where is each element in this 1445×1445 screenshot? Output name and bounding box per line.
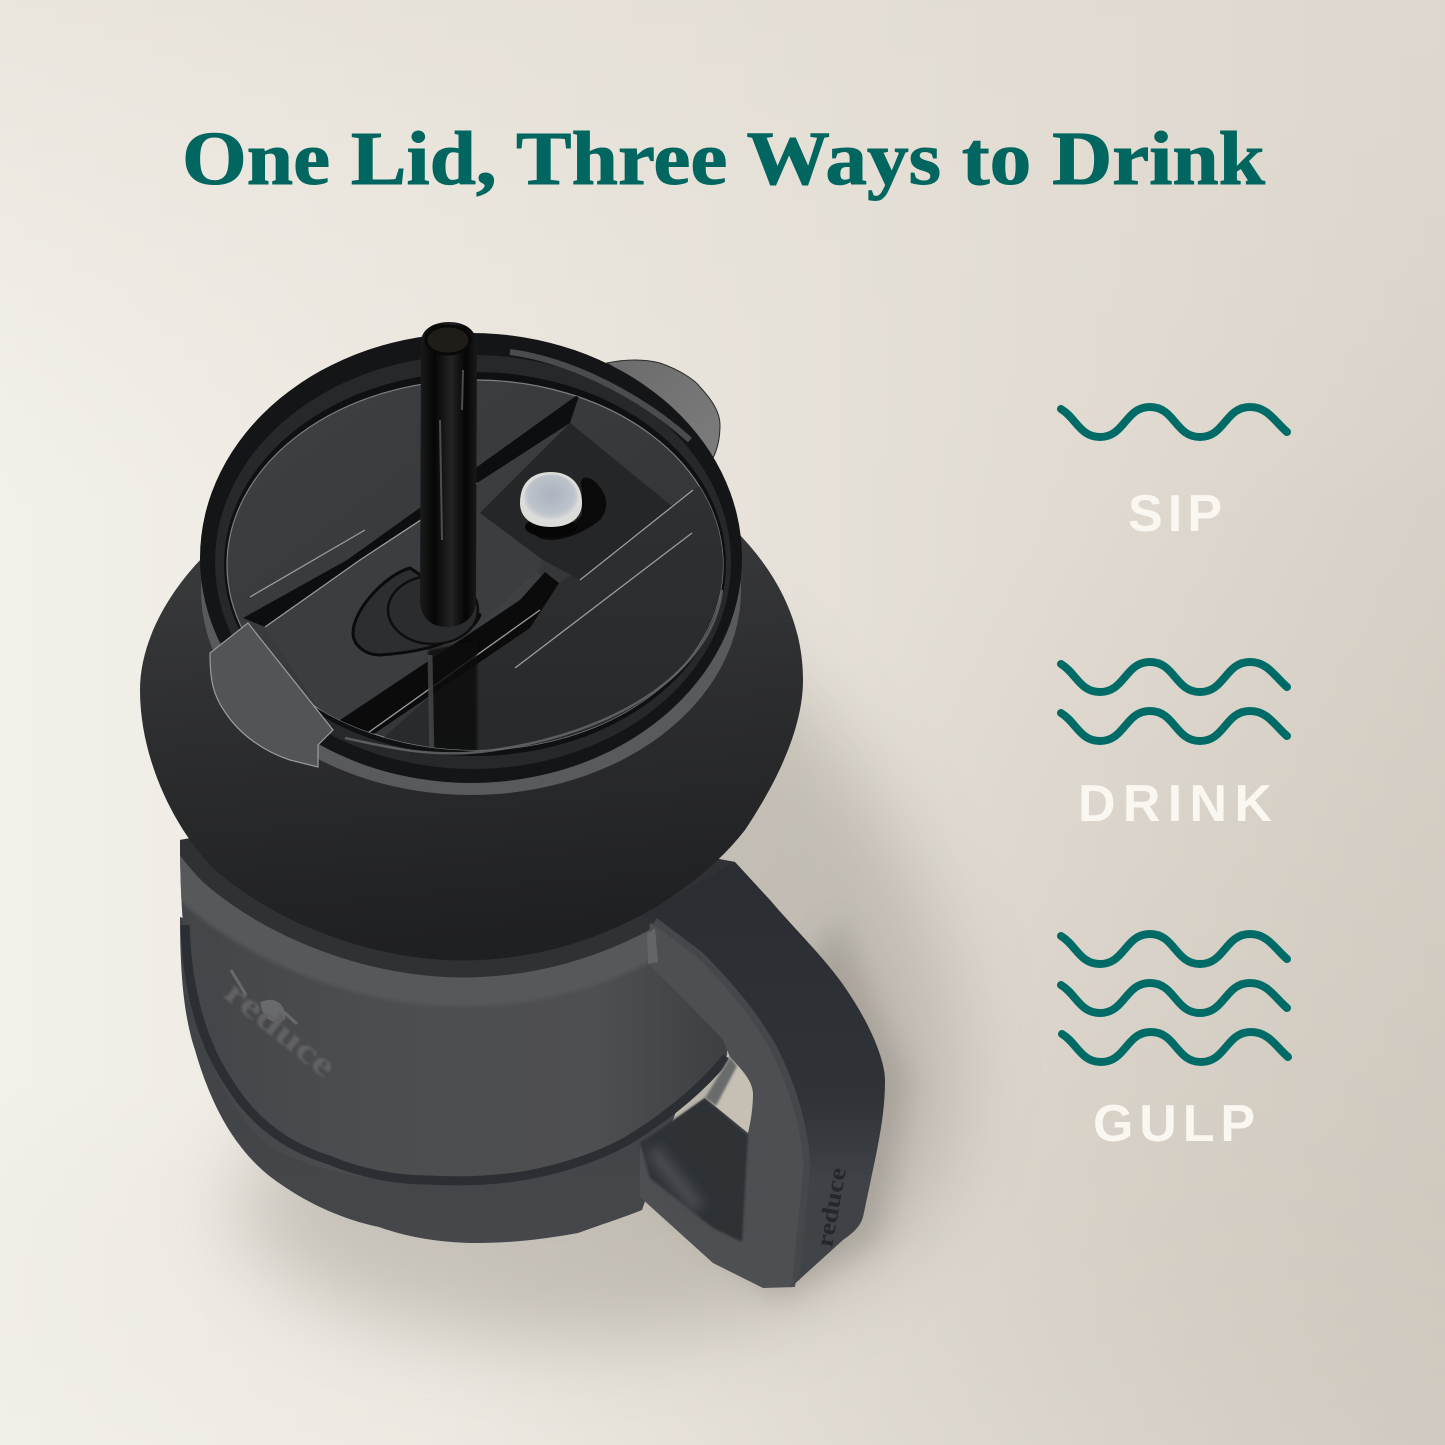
rim highlight arc [345,590,722,753]
straw opening [426,326,470,354]
logo on mug body [217,970,343,1085]
reflection lines [250,483,693,735]
straw [420,322,477,627]
body base groove [185,925,727,1181]
gulp wave icon [1061,934,1288,1062]
mug base [180,917,680,1243]
handle joint tip [647,928,658,964]
center pivot oval [353,568,480,655]
lid rim inner shadow [224,372,726,756]
mug body [180,800,735,1184]
lid inner panel [227,380,723,750]
lid details [243,396,723,750]
logo on mug body: reduce [217,973,343,1085]
plug seat [535,478,606,540]
lid tab [607,360,720,458]
gulp label: GULP [1093,1095,1255,1153]
option: drink [1061,662,1287,833]
mug handle [640,862,885,1288]
body bands under shoulder [180,838,735,1006]
handle arm highlight [652,1150,698,1208]
reflection light strip [430,655,432,760]
mug shoulder [140,530,803,961]
handle ridge [655,921,807,1280]
lower right panel [384,486,723,750]
slider plate [318,708,345,722]
upper dark groove [243,393,580,627]
lid rim band [215,355,731,769]
sip wave icon [1061,407,1287,437]
opening inner shade [705,1057,737,1106]
rim top highlight [510,352,690,440]
straw reflection [427,644,478,750]
button recess [480,423,673,580]
mug illustration [140,322,885,1288]
handle opening [705,1057,753,1133]
handle top face [640,862,885,1288]
lower dark groove [337,572,559,740]
option: gulp [1061,934,1288,1153]
title: One Lid, Three Ways to Drink [182,117,1266,201]
lid skirt [201,385,741,795]
mug shadow [230,620,960,1340]
sip label: SIP [1128,485,1222,543]
lid outer ring [200,333,742,783]
handle lower arm [640,1098,748,1242]
slider strip [535,574,542,582]
straw highlight [440,370,463,540]
option: sip [1061,407,1287,543]
drink wave icon [1061,662,1287,741]
drink label: DRINK [1078,775,1272,833]
silicone vent plug [520,472,606,540]
handle front face [640,923,810,1288]
handle embossed wordmark: reduce [812,1165,852,1249]
drink spout tab [210,623,333,767]
